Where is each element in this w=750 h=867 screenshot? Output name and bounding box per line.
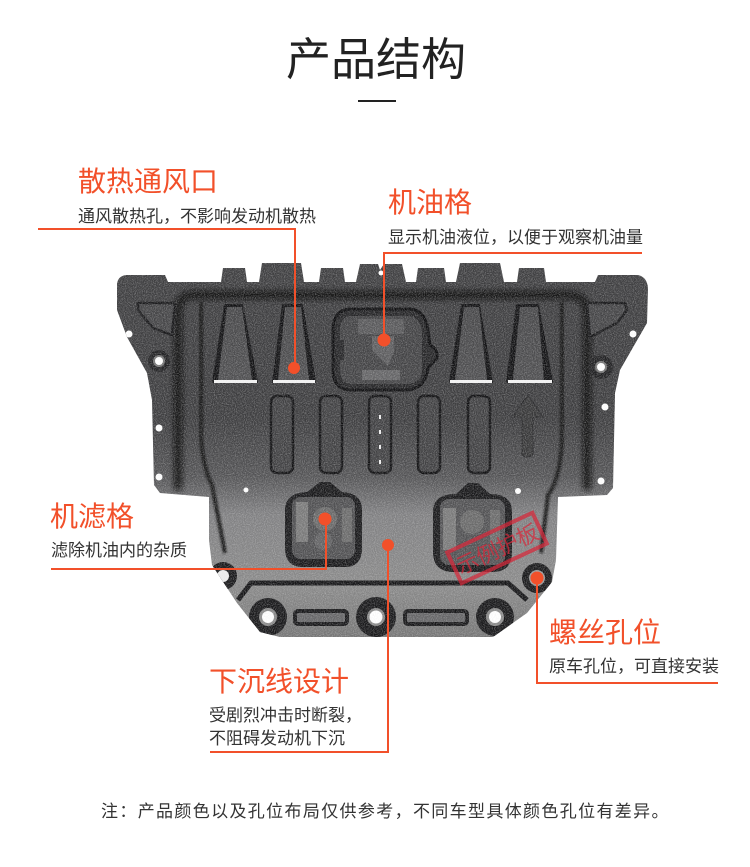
- title: 产品结构: [286, 34, 466, 85]
- left filter window: [285, 482, 362, 567]
- heading: screw hole: 螺丝孔位: [549, 617, 661, 648]
- stamp: sample plate: 示例护板: [452, 519, 543, 579]
- rib dots: [379, 415, 381, 464]
- vents: [213, 305, 552, 382]
- text: screw hole: 原车孔位，可直接安装: [549, 657, 719, 676]
- oil window: [333, 309, 437, 390]
- heading: filter: 机滤格: [50, 501, 134, 532]
- text: sink line: 受剧烈冲击时断裂，: [209, 706, 362, 725]
- text: oil window: 显示机油液位，以便于观察机油量: [388, 228, 643, 247]
- grain texture: [110, 260, 655, 640]
- text: sink line: [209, 706, 362, 748]
- lower slots: [295, 611, 467, 624]
- lower ridge: [238, 583, 527, 600]
- callout line: screw hole: [530, 572, 718, 683]
- mounting holes: [126, 270, 636, 637]
- text: vent: 通风散热孔，不影响发动机散热: [78, 207, 316, 226]
- heading: oil window: 机油格: [388, 187, 472, 218]
- heading: vent: 散热通风口: [78, 166, 218, 197]
- vent slits: [214, 380, 552, 383]
- arrow embossed: [512, 395, 543, 457]
- callout line: sink line: [210, 539, 394, 752]
- footnote: 注：产品颜色以及孔位布局仅供参考，不同车型具体颜色孔位有差异。: [101, 802, 670, 821]
- plate body: [117, 263, 648, 637]
- ribs: [271, 396, 490, 473]
- text: sink line: 不阻碍发动机下沉: [209, 729, 345, 748]
- callout line: filter: [51, 512, 332, 569]
- title underline: [358, 100, 396, 102]
- product illustration: skid plate: [38, 228, 718, 753]
- right filter window: [433, 483, 512, 572]
- callout line: vent: [38, 229, 300, 374]
- callout line: oil window: [378, 253, 642, 346]
- text: filter: 滤除机油内的杂质: [51, 541, 187, 560]
- inner well shadows: [138, 295, 627, 553]
- heading: sink line: 下沉线设计: [209, 666, 349, 697]
